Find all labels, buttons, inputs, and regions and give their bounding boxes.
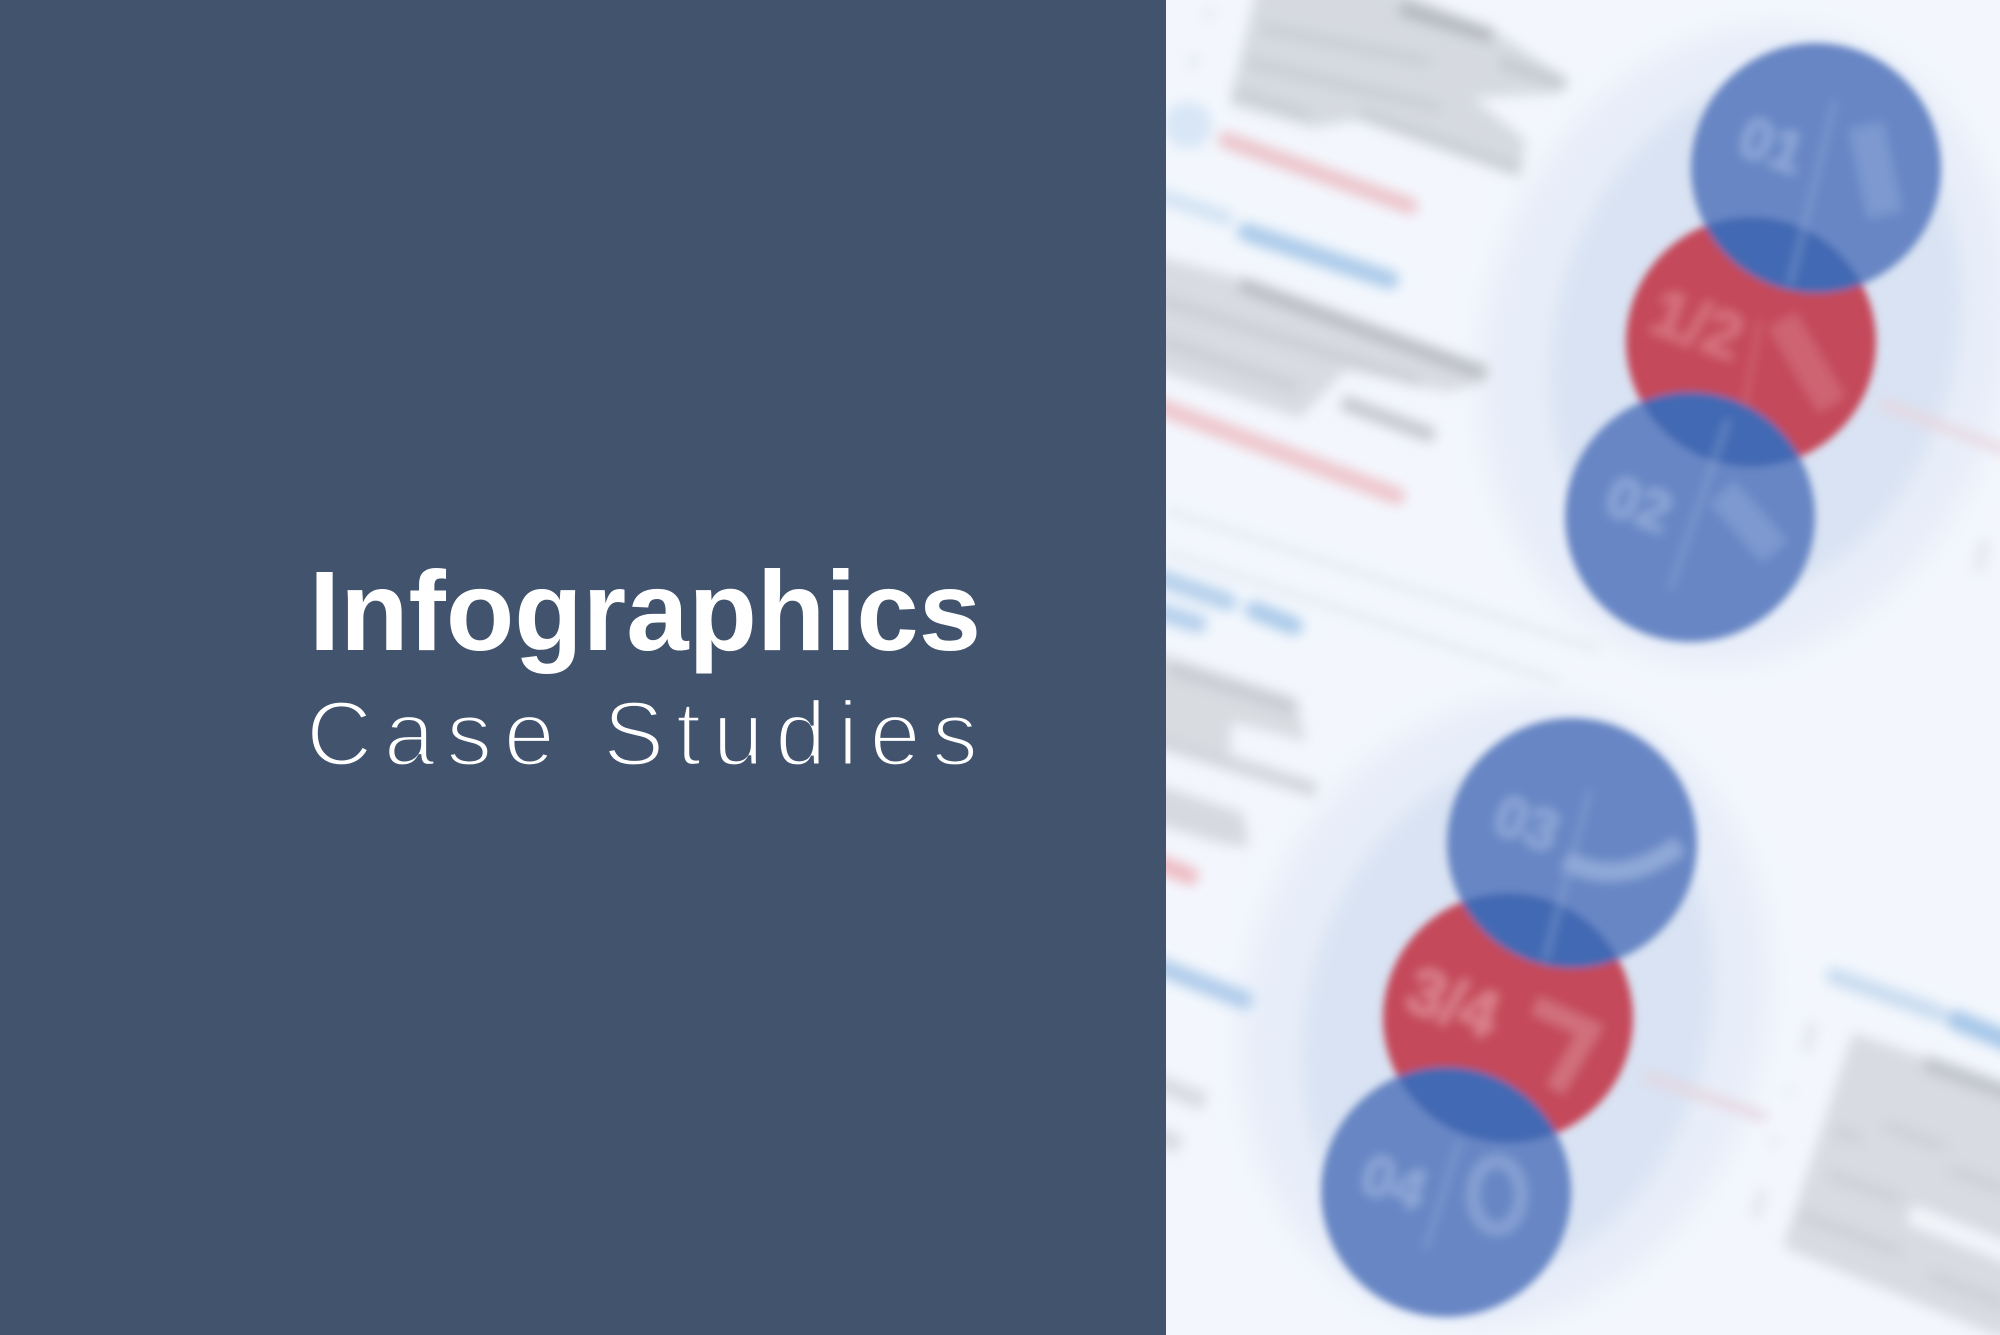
text: red fragment: [1155, 862, 1190, 876]
circle: red 3/4: 3/4: [1398, 952, 1509, 1053]
line: red link 1: [1226, 140, 1410, 206]
connector: red upper: [1879, 402, 2000, 452]
halo: lower circle group: [1238, 696, 1772, 1328]
icon: light circle: [1164, 101, 1212, 149]
margin marks: [1192, 10, 1985, 1218]
line: red link 2: [1155, 405, 1397, 496]
subtitle: Case Studies: Case Studies: [306, 683, 978, 785]
circle group: 03, 3/4, 04: [1321, 718, 1697, 1317]
text block: middle left: [1150, 254, 1488, 436]
circle: blue 01: [1686, 37, 1946, 299]
heading: blue 1: [1155, 194, 1390, 280]
panel: dark title panel: [0, 0, 1166, 1335]
circle: blue 03: 03: [1485, 782, 1568, 865]
halo: upper circle group: [1477, 23, 2000, 667]
circle: blue 04: [1316, 1061, 1576, 1323]
connector: red lower: [1644, 1075, 1767, 1118]
title: Infographics: Infographics: [309, 548, 981, 674]
circle: red 1/2: [1626, 217, 1876, 467]
text block: lower right: [1783, 1033, 2000, 1335]
text block: top left: [1229, 0, 1569, 178]
heading: blue 4: [1834, 976, 2000, 1044]
heading: blue 2: [1160, 578, 1294, 626]
faint diagonal rules: [1165, 510, 1600, 682]
circle: blue 02: 02: [1597, 463, 1680, 546]
circle: blue 01: 01: [1730, 104, 1813, 187]
panel: blurred infographic preview: [1150, 0, 2000, 1335]
text: grey fragments: [1155, 1082, 1205, 1146]
circle: blue 04: 04: [1352, 1141, 1435, 1224]
circle: red 1/2: 1/2: [1642, 274, 1753, 375]
heading: blue 3: [1155, 965, 1244, 1000]
text block: lower left: [1150, 650, 1316, 847]
circle group: 01, 1/2, 02: [1565, 43, 1941, 642]
blurred text blocks: [1150, 0, 2000, 1335]
circle: blue 03: [1442, 712, 1702, 974]
circle: blue 02: [1560, 386, 1820, 648]
circle: red 3/4: [1383, 893, 1633, 1143]
